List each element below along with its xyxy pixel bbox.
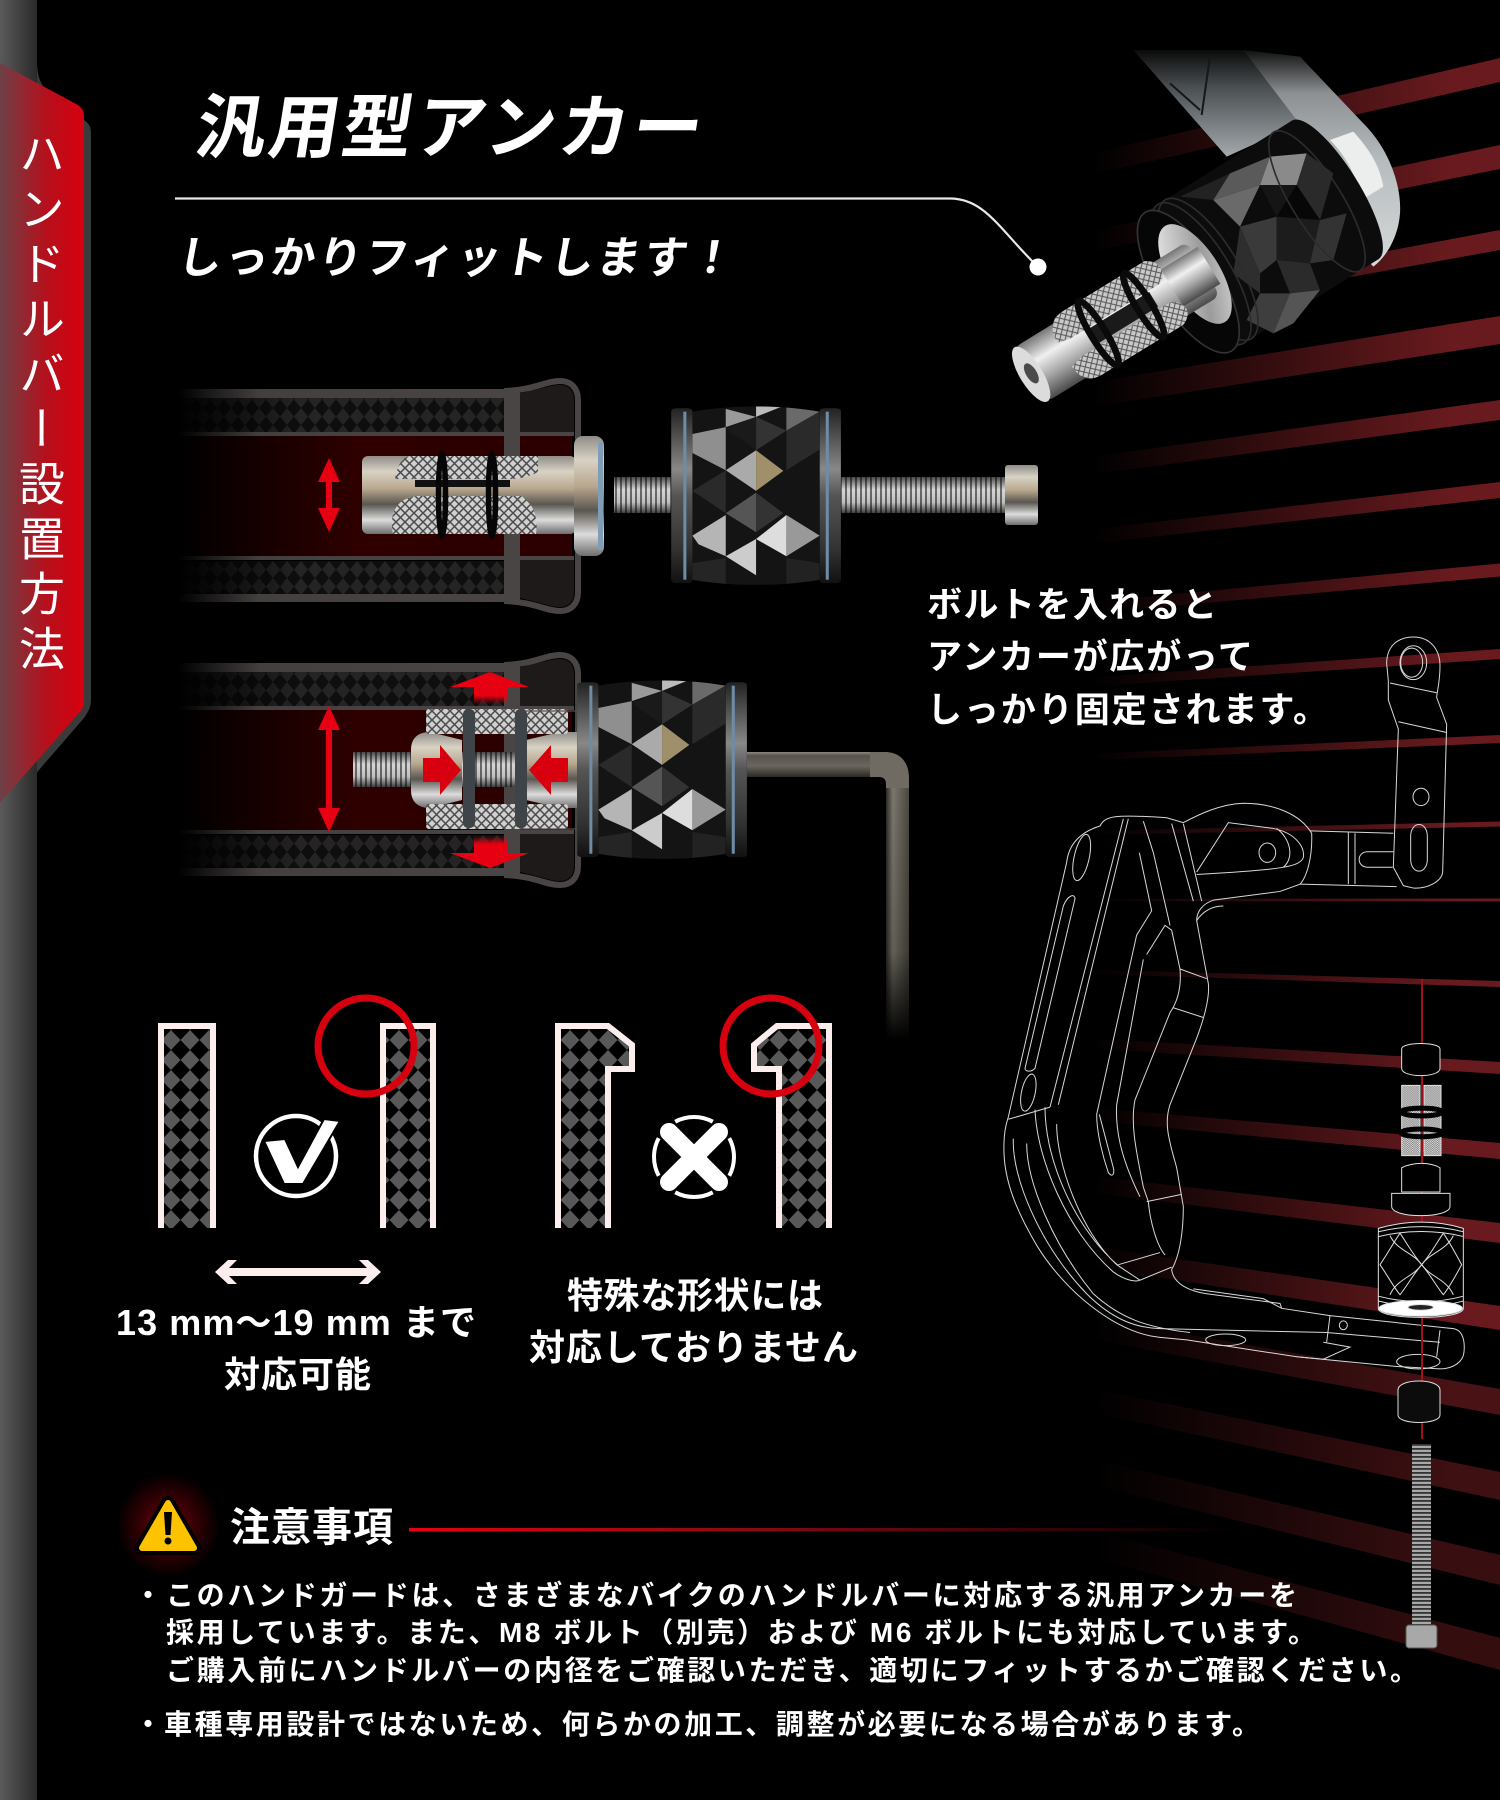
- diagram: pipe with anchor before tightening: [178, 381, 1038, 611]
- nut outline: [1378, 1222, 1463, 1317]
- expanded anchor: [353, 709, 580, 829]
- flange: [1392, 1193, 1450, 1216]
- notice bullets: ・: [134, 1580, 162, 1611]
- knurled anchor section: [1401, 1085, 1442, 1156]
- bolt shaft and head: [841, 465, 1038, 525]
- subtitle: しっかりフィットします！: [174, 234, 738, 283]
- caption: [529, 1275, 858, 1368]
- pipe section bottom: [178, 655, 578, 885]
- hex wrench: [747, 752, 909, 1040]
- notice bullets: 車種専用設計ではないため、何らかの加工、調整が必要になる場合があります。: [164, 1708, 1260, 1740]
- long bolt: [1406, 1444, 1437, 1648]
- notice bullets: ご購入前にハンドルバーの内径をご確認いただき、適切にフィットするかご確認ください。: [166, 1654, 1418, 1686]
- comparison: incompatible flared bar: [529, 998, 858, 1368]
- red circle: [318, 998, 414, 1094]
- product photo: anchor on bar end: [1002, 50, 1400, 412]
- explanation text: ボルトを入れると: [927, 586, 1217, 625]
- up-down arrow large: [318, 706, 340, 832]
- width caption: [116, 1302, 476, 1395]
- diagram: pipe with anchor expanded: [178, 655, 909, 1040]
- explanation text: しっかり固定されます。: [927, 691, 1328, 730]
- side strip and red ribbon: [0, 0, 91, 1800]
- diamond nut: [671, 405, 841, 587]
- left bar: [161, 1026, 213, 1228]
- cross icon: [654, 1117, 734, 1197]
- bolt head dark: [1398, 1381, 1440, 1422]
- callout leader line with dot: [175, 198, 1046, 276]
- up-down arrow small: [318, 458, 340, 532]
- check icon: [256, 1116, 340, 1196]
- right bar: [754, 1026, 829, 1228]
- inward arrows: [423, 745, 568, 795]
- notice bullets: ・: [134, 1709, 162, 1740]
- background rays: [1000, 58, 1500, 1670]
- red circle: [723, 998, 819, 1094]
- comparison: compatible straight bar: [116, 998, 476, 1395]
- exploded assembly: [1378, 979, 1463, 1648]
- left bar: [558, 1026, 632, 1228]
- warning icon: [116, 1473, 220, 1577]
- pipe section top: [178, 381, 578, 611]
- notice bullets: [134, 1579, 1418, 1740]
- axis line: [1421, 979, 1423, 1439]
- title: 汎用型アンカー: [191, 88, 709, 167]
- width caption: 対応可能: [224, 1354, 371, 1395]
- bolt thread short: [614, 477, 671, 513]
- right bar: [383, 1026, 433, 1228]
- diamond nut copy: [577, 679, 747, 861]
- explanation text: [927, 586, 1328, 730]
- caption: 対応しておりません: [529, 1327, 858, 1368]
- notice bullets: このハンドガードは、さまざまなバイクのハンドルバーに対応する汎用アンカーを: [166, 1579, 1297, 1611]
- width caption: 13 mm〜19 mm まで: [116, 1302, 476, 1343]
- outward arrows: [450, 672, 529, 868]
- anchor cap: [1402, 1044, 1440, 1076]
- notice heading: 注意事項: [230, 1506, 393, 1550]
- width arrow: [215, 1260, 381, 1284]
- handguard wireframe: [1004, 637, 1464, 1369]
- heading rule: [409, 1528, 1239, 1532]
- anchor lower section: [1402, 1163, 1440, 1192]
- anchor body: [362, 436, 604, 556]
- notice section: [116, 1473, 1418, 1740]
- explanation text: アンカーが広がって: [927, 638, 1253, 677]
- caption: 特殊な形状には: [567, 1275, 823, 1316]
- notice bullets: 採用しています。また、M8 ボルト（別売）および M6 ボルトにも対応しています。: [166, 1617, 1316, 1648]
- side tab label: ハンドルバー設置方法: [13, 130, 65, 680]
